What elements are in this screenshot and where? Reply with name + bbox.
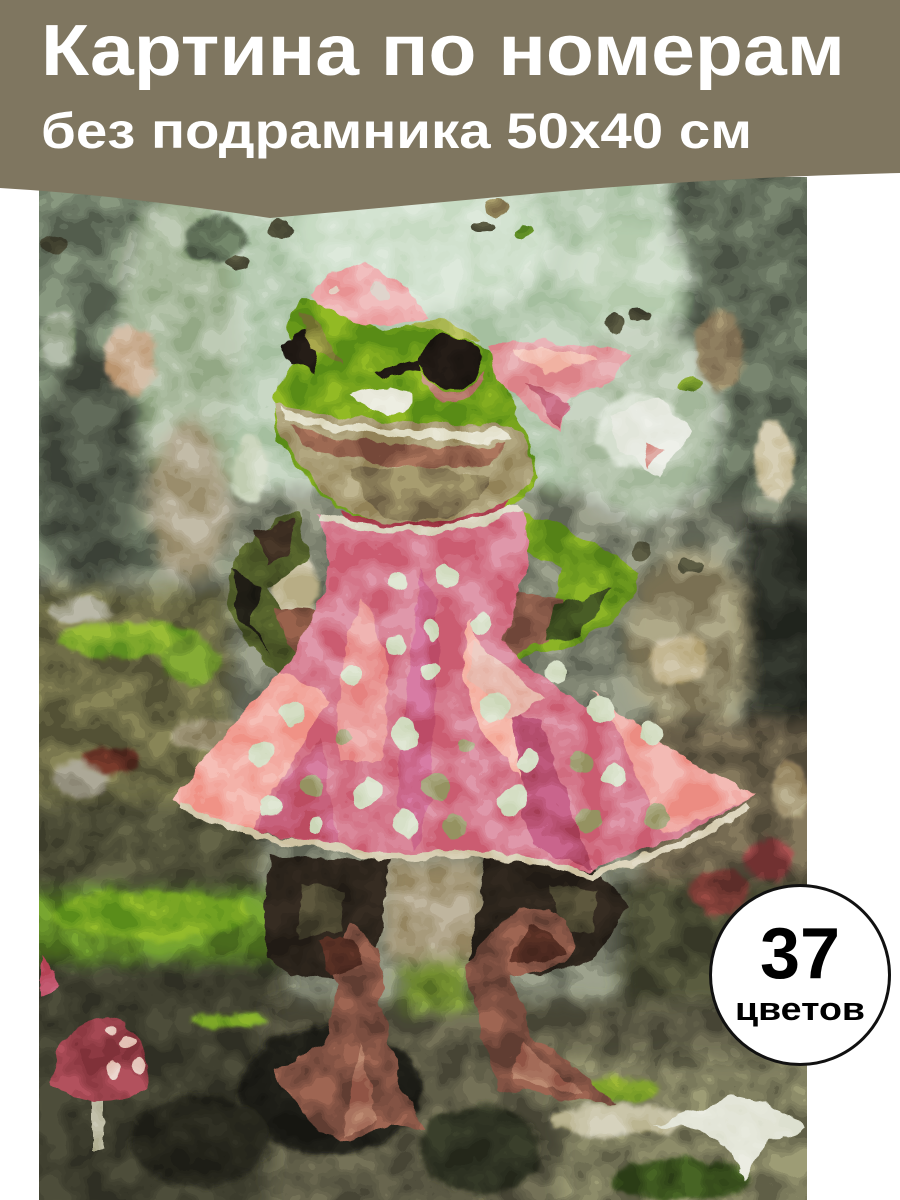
pink bow: [308, 267, 632, 435]
frog legs: [264, 845, 628, 1140]
header banner: [0, 0, 900, 218]
white flower and leaves: [41, 198, 807, 1180]
toadstool mushroom: [39, 955, 148, 1150]
forest background: [20, 150, 830, 1200]
pink polka dot dress: [172, 505, 755, 876]
subtitle: без подрамника 50х40 см: [41, 103, 752, 159]
frog head and body: [272, 300, 540, 534]
badge: 37 colours: цветов: [735, 991, 865, 1027]
badge: 37 colours: 37: [760, 914, 840, 994]
frog arms: [226, 511, 638, 674]
title: Картина по номерам: [41, 11, 845, 91]
painting: frog in a pink dress: [39, 177, 807, 1200]
badge: 37 colours: [710, 886, 890, 1064]
